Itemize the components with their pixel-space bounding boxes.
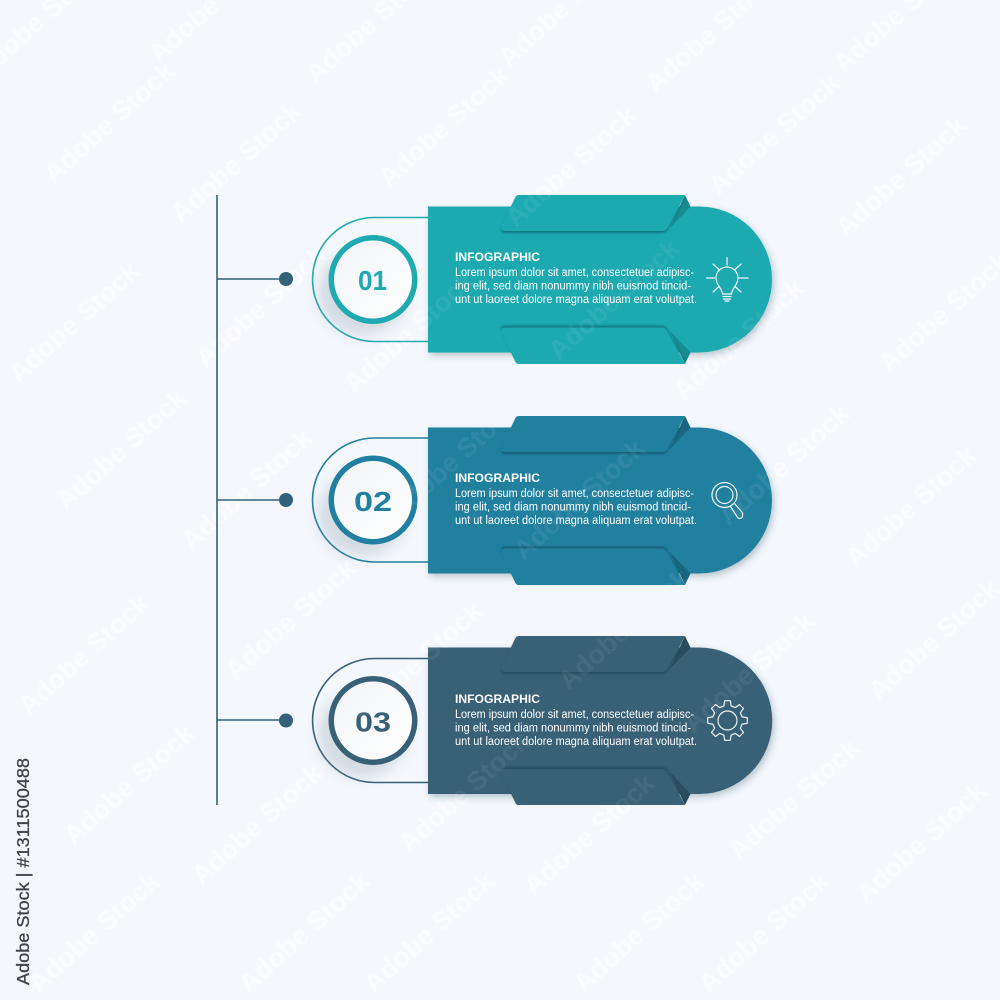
watermark over cards: Adobe Stock	[373, 59, 516, 193]
watermark pattern on background: Adobe Stock	[13, 587, 156, 721]
watermark pattern on background: Adobe Stock	[220, 552, 363, 686]
watermark pattern on background: Adobe Stock	[50, 382, 193, 516]
step 2 connector dot	[279, 493, 293, 507]
step 2 top tab	[501, 416, 690, 452]
step 1 text: Lorem ipsum dolor sit amet, consectetuer adipisc-	[455, 267, 694, 279]
step 2 text	[455, 471, 697, 527]
watermark pattern on background: Adobe Stock	[500, 99, 643, 233]
step 1 number badge: 01	[358, 265, 387, 296]
watermark over cards	[338, 59, 856, 901]
watermark pattern on background: Adobe Stock	[38, 55, 181, 189]
icon: magnifier	[712, 482, 743, 518]
step 3 text: INFOGRAPHIC	[455, 692, 540, 706]
step 2 outline capsule	[312, 438, 430, 562]
watermark over cards: Adobe Stock	[668, 272, 811, 406]
watermark pattern on background: Adobe Stock	[518, 767, 661, 901]
watermark pattern on background: Adobe Stock	[3, 255, 146, 389]
watermark pattern on background: Adobe Stock	[830, 109, 973, 243]
watermark pattern on background: Adobe Stock	[23, 865, 166, 999]
step 2	[279, 416, 772, 585]
step 3	[279, 636, 772, 805]
watermark pattern on background: Adobe Stock	[668, 272, 811, 406]
watermark pattern on background: Adobe Stock	[850, 775, 993, 909]
watermark over cards: Adobe Stock	[383, 392, 526, 526]
step 3 top tab	[501, 636, 690, 672]
step 2 text: INFOGRAPHIC	[455, 471, 540, 485]
step 2 text: Lorem ipsum dolor sit amet, consectetuer adipisc-	[455, 488, 694, 500]
step 1 bottom tab	[501, 328, 690, 364]
icon: light bulb	[706, 258, 748, 301]
step 3 text: unt ut laoreet dolore magna aliquam erat volutpat.	[455, 736, 697, 748]
step 1 text	[455, 250, 697, 306]
watermark pattern on background: Adobe Stock	[713, 397, 856, 531]
watermark pattern on background: Adobe Stock	[840, 439, 983, 573]
watermark pattern on background: Adobe Stock	[190, 239, 333, 373]
watermark pattern on background: Adobe Stock	[165, 95, 308, 229]
step 1 text: ing elit, sed diam nonummy nibh euismod tincid-	[455, 280, 691, 292]
step 1 number badge	[318, 238, 415, 335]
watermark over cards: Adobe Stock	[346, 595, 489, 729]
watermark over cards: Adobe Stock	[393, 725, 536, 859]
watermark over cards: Adobe Stock	[713, 397, 856, 531]
watermark pattern on background: Adobe Stock	[58, 717, 201, 851]
step 1 text: INFOGRAPHIC	[455, 250, 540, 264]
step 2 bottom tab	[501, 548, 690, 585]
watermark pattern on background: Adobe Stock	[373, 59, 516, 193]
icon: gear	[708, 701, 747, 740]
step 2 text: ing elit, sed diam nonummy nibh euismod tincid-	[455, 502, 691, 514]
step 3 number badge: 03	[355, 706, 391, 738]
step 1	[279, 195, 772, 364]
watermark over cards: Adobe Stock	[543, 232, 686, 366]
step 1 connector dot	[279, 272, 293, 286]
step 3 text	[455, 692, 697, 748]
step 1 card body	[428, 206, 772, 352]
step 1 text: unt ut laoreet dolore magna aliquam erat volutpat.	[455, 294, 697, 306]
watermark pattern on background: Adobe Stock	[346, 595, 489, 729]
step 3 card body	[428, 648, 772, 794]
watermark over cards: Adobe Stock	[553, 562, 696, 696]
watermark over cards: Adobe Stock	[500, 99, 643, 233]
step 3 number badge	[318, 679, 415, 777]
step 2 card body	[428, 428, 772, 574]
step 1 outline capsule	[313, 218, 430, 342]
watermark over cards: Adobe Stock	[518, 767, 661, 901]
step 2 text: unt ut laoreet dolore magna aliquam erat volutpat.	[455, 515, 697, 527]
step 2 number badge: 02	[354, 486, 392, 517]
step 2 number badge	[318, 458, 415, 556]
watermark over cards: Adobe Stock	[678, 605, 821, 739]
watermark pattern on background: Adobe Stock	[693, 865, 836, 999]
watermark pattern on background: Adobe Stock	[703, 67, 846, 201]
watermark pattern on background: Adobe Stock	[393, 725, 536, 859]
watermark pattern on background: Adobe Stock	[176, 422, 319, 556]
step 3 outline capsule	[313, 658, 430, 782]
watermark pattern on background: Adobe Stock	[723, 732, 866, 866]
side credit text: Adobe Stock | #1311500488	[13, 758, 33, 985]
watermark pattern on background: Adobe Stock	[568, 865, 711, 999]
step 1 top tab	[501, 195, 690, 231]
timeline vertical line with branches	[217, 195, 286, 805]
step 3 text: Lorem ipsum dolor sit amet, consectetuer adipisc-	[455, 709, 694, 721]
watermark over cards: Adobe Stock	[338, 265, 481, 399]
watermark pattern on background: Adobe Stock	[186, 757, 329, 891]
watermark pattern on background: Adobe Stock	[358, 865, 501, 999]
watermark pattern on background: Adobe Stock	[233, 865, 376, 999]
step 3 text: ing elit, sed diam nonummy nibh euismod tincid-	[455, 722, 691, 734]
step 3 connector dot	[279, 714, 293, 728]
watermark pattern on background: Adobe Stock	[338, 265, 481, 399]
watermark pattern on background: Adobe Stock	[678, 605, 821, 739]
step 3 bottom tab	[501, 769, 690, 805]
watermark over cards: Adobe Stock	[508, 432, 651, 566]
